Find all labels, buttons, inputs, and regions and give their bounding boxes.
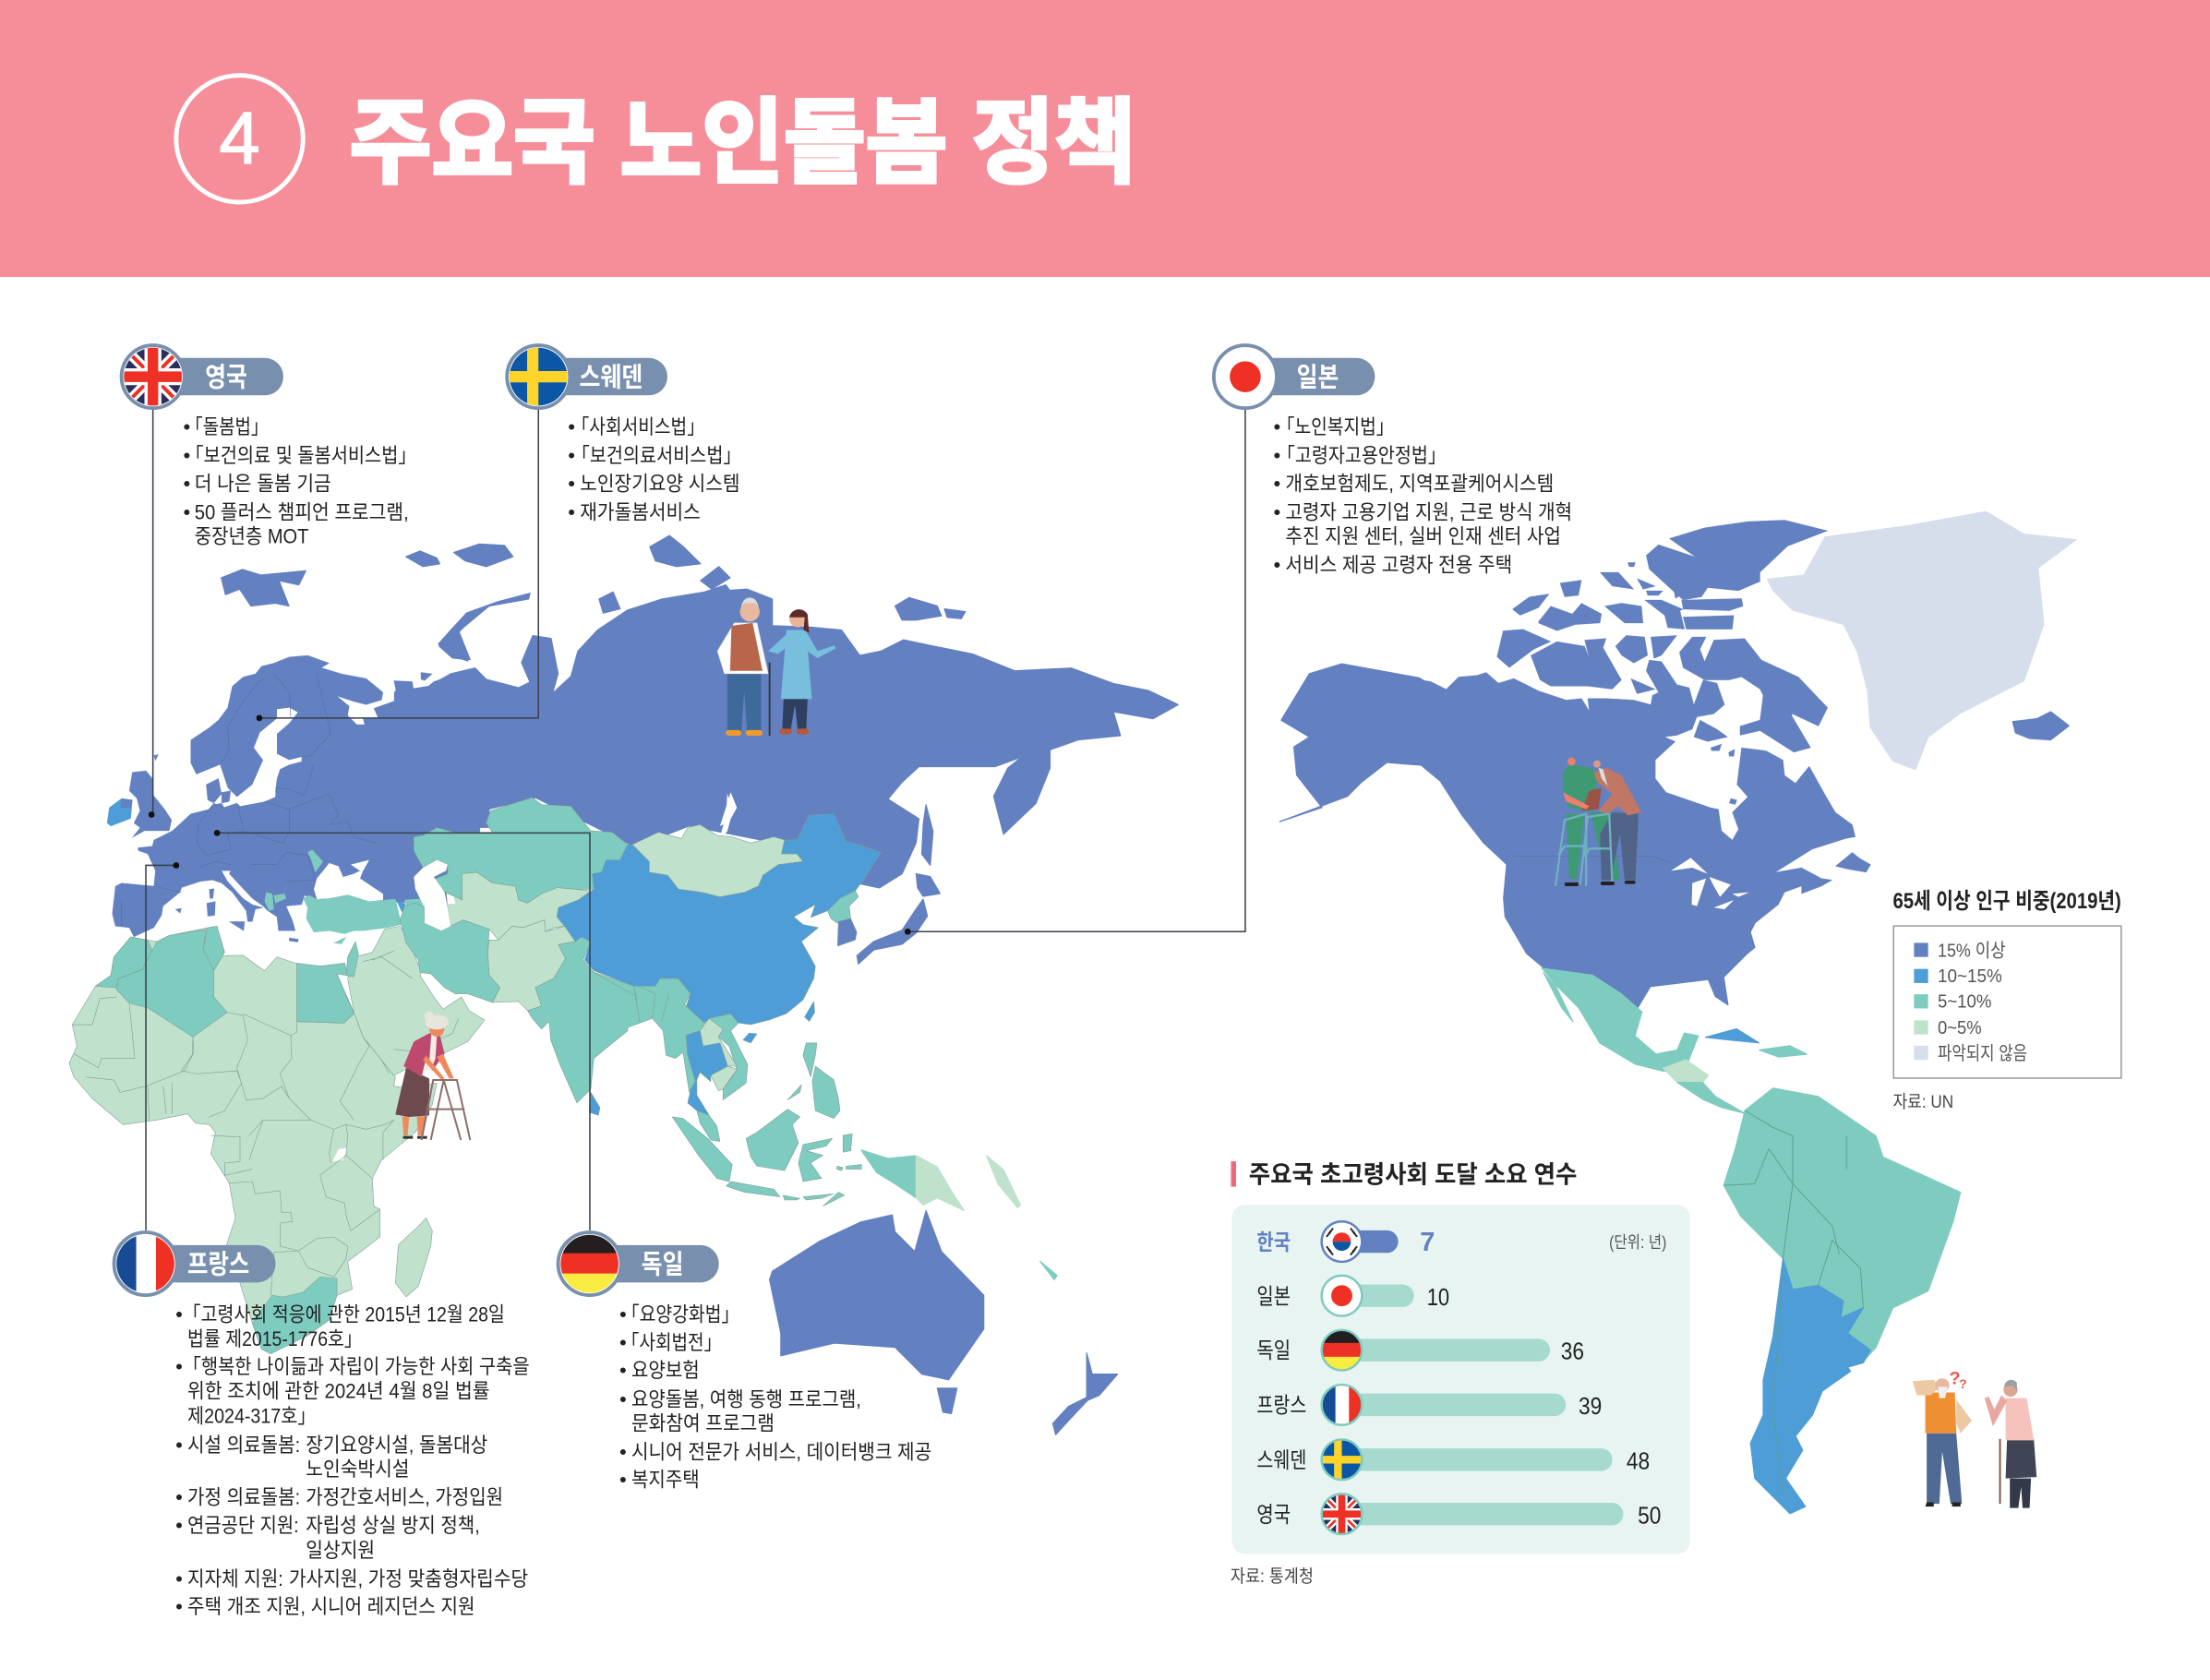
legend: 5~10%	[1938, 991, 1991, 1013]
map: Mediterranean islands	[175, 889, 298, 942]
figure: two seniors talking: ?	[1959, 1377, 1967, 1391]
map: Central and East Asia	[400, 792, 881, 1206]
map: Canada and USA	[1422, 520, 1871, 978]
text block: 프랑스 policies: •	[175, 1514, 183, 1537]
row: 영국 50: 50	[1638, 1503, 1661, 1529]
text block: 스웨덴 policies: 노인장기요양 시스템	[580, 472, 740, 495]
text block: 스웨덴 policies: 「사회서비스법」	[571, 415, 704, 438]
leader lines to countries	[146, 409, 1245, 1230]
map: Greenland	[1768, 511, 2076, 770]
text block: 일본 policies: 추진 지원 센터, 실버 인재 센터 사업	[1285, 525, 1561, 548]
text block: 독일 policies: •	[619, 1387, 627, 1410]
world map	[69, 511, 2076, 1514]
text block: 프랑스 policies: 「고령사회 적응에 관한 2015년 12월 28일	[183, 1303, 505, 1326]
section number badge: 4	[219, 97, 260, 179]
row: 일본 10	[1256, 1276, 1449, 1316]
source: UN: 자료: UN	[1892, 1092, 1953, 1112]
row: 프랑스 39: 프랑스	[1256, 1393, 1306, 1418]
text block: 독일 policies: •	[619, 1303, 627, 1326]
text block: 프랑스 policies: 법률 제2015-1776호」	[187, 1327, 362, 1350]
text block: 스웨덴 policies	[568, 415, 741, 523]
text block: 프랑스 policies: 장기요양시설, 돌봄대상	[306, 1434, 487, 1457]
text block: 프랑스 policies: 가정간호서비스, 가정입원	[306, 1486, 503, 1509]
row: 스웨덴 48: 48	[1627, 1448, 1650, 1474]
text block: 프랑스 policies: 노인숙박시설	[306, 1458, 410, 1481]
row: 프랑스 39	[1256, 1385, 1602, 1425]
row: 영국 50	[1256, 1494, 1661, 1534]
text block: 일본 policies: •	[1273, 472, 1280, 495]
unit note: (단위: 년)	[1609, 1232, 1666, 1252]
text block: 독일 policies	[619, 1303, 931, 1492]
text block: 독일 policies: 시니어 전문가 서비스, 데이터뱅크 제공	[631, 1441, 931, 1464]
section number badge	[176, 76, 303, 202]
legend: 0~5%	[1938, 1017, 1982, 1038]
map: Mexico and Central America	[1542, 968, 1807, 1113]
row: 한국 7	[1256, 1221, 1435, 1262]
map: New Guinea and Pacific	[861, 1150, 1057, 1279]
text block: 영국 policies: 더 나은 돌봄 기금	[195, 472, 331, 495]
row: 일본 10: 10	[1427, 1285, 1449, 1311]
badge: 영국	[122, 345, 283, 408]
text block: 프랑스 policies: 연금공단 지원:	[187, 1514, 299, 1537]
map: South America	[1724, 1088, 1961, 1514]
text block: 독일 policies: 문화참여 프로그램	[631, 1411, 775, 1434]
text block: 프랑스 policies: •	[175, 1567, 183, 1590]
map: Tasmania	[937, 1388, 957, 1413]
text block: 영국 policies: 중장년층 MOT	[195, 524, 308, 547]
badge: 독일	[559, 1232, 719, 1295]
panel: years to super-aged society	[1231, 1205, 1690, 1554]
badge: 프랑스: 프랑스	[187, 1249, 249, 1279]
text block: 일본 policies: 「노인복지법」	[1277, 415, 1394, 438]
text block: 스웨덴 policies: 「보건의료서비스법」	[571, 444, 741, 467]
text block: 프랑스 policies: 제2024-317호」	[187, 1405, 316, 1428]
badge: 스웨덴	[507, 345, 667, 408]
text block: 프랑스 policies: 일상지원	[306, 1539, 375, 1562]
text block: 독일 policies: 요양돌봄, 여행 동행 프로그램,	[631, 1387, 861, 1410]
legend: 10~15%	[1938, 966, 2002, 987]
map: Turkey and Caucasus	[303, 894, 402, 934]
legend	[1893, 926, 2121, 1078]
map: Australia	[770, 1211, 984, 1380]
text block: 영국 policies: •	[183, 444, 190, 467]
figure: old man and nurse	[717, 597, 835, 736]
text block: 프랑스 policies: 시설 의료돌봄:	[187, 1434, 300, 1457]
map: Japan	[857, 874, 940, 964]
text block: 프랑스 policies: 위한 조치에 관한 2024년 4월 8일 법률	[187, 1379, 490, 1402]
row: 영국 50: 영국	[1256, 1503, 1291, 1528]
map: Newfoundland	[1835, 852, 1871, 872]
text block: 일본 policies: 고령자 고용기업 지원, 근로 방식 개혁	[1285, 500, 1572, 523]
header band	[0, 0, 2210, 277]
text block: 프랑스 policies: 주택 개조 지원, 시니어 레지던스 지원	[187, 1595, 475, 1618]
text block: 일본 policies: 서비스 제공 고령자 전용 주택	[1285, 553, 1512, 576]
map: Caspian and Aral	[414, 860, 450, 930]
text block: 프랑스 policies: 자립성 상실 방지 정책,	[306, 1514, 480, 1537]
map: southern USA	[1542, 958, 1734, 1008]
text block: 스웨덴 policies: •	[568, 444, 575, 467]
text block: 독일 policies: •	[619, 1469, 627, 1492]
text block: 스웨덴 policies: •	[568, 472, 575, 495]
map: Russia	[222, 535, 1178, 888]
badge: 일본: 일본	[1297, 362, 1339, 392]
map: Asian borders	[594, 972, 669, 1022]
map: Baffin	[1679, 637, 1828, 726]
text block: 일본 policies: •	[1273, 444, 1280, 467]
text block: 프랑스 policies: 가정 의료돌봄:	[187, 1486, 300, 1509]
text block: 일본 policies: 개호보험제도, 지역포괄케어시스템	[1285, 472, 1554, 495]
row: 일본 10: 일본	[1256, 1285, 1291, 1309]
text block: 독일 policies: •	[619, 1441, 627, 1464]
legend: 파악되지 않음	[1938, 1043, 2027, 1064]
source: 통계청: 자료: 통계청	[1231, 1566, 1314, 1587]
row: 독일 36	[1256, 1330, 1584, 1371]
text block: 스웨덴 policies: •	[568, 415, 575, 438]
text block: 프랑스 policies	[175, 1303, 530, 1618]
map: Africa and Arabia	[69, 926, 485, 1354]
text block: 영국 policies: 「돌봄법」	[186, 415, 269, 438]
text block: 프랑스 policies: 지자체 지원:	[187, 1567, 283, 1590]
badge: 독일: 독일	[642, 1249, 683, 1279]
text block: 일본 policies: •	[1273, 500, 1280, 523]
text block: 독일 policies: 「사회법전」	[621, 1331, 722, 1354]
map: Baltic sea	[194, 708, 302, 810]
badge: 프랑스	[114, 1232, 275, 1295]
text block: 영국 policies: •	[183, 500, 190, 523]
map: Europe	[107, 630, 480, 944]
badge: 일본	[1214, 345, 1375, 408]
row: 스웨덴 48	[1256, 1439, 1650, 1480]
text block: 독일 policies: 복지주택	[631, 1469, 700, 1492]
text block: 독일 policies: 「요양강화법」	[621, 1303, 739, 1326]
text block: 프랑스 policies: 가사지원, 가정 맞춤형자립수당	[289, 1567, 528, 1590]
row: 한국 7: 한국	[1256, 1230, 1291, 1255]
map: Great Lakes	[1671, 858, 1749, 909]
text block: 영국 policies: •	[183, 415, 190, 438]
badge: 스웨덴: 스웨덴	[580, 362, 643, 392]
row: 스웨덴 48: 스웨덴	[1256, 1448, 1306, 1473]
text block: 스웨덴 policies: •	[568, 500, 575, 523]
figure: couple with walker	[1555, 758, 1641, 886]
map: Iceland	[2012, 712, 2069, 740]
map: Ireland	[107, 798, 132, 826]
text block: 영국 policies: 50 플러스 챔피언 프로그램,	[195, 500, 409, 523]
text block: 독일 policies: •	[619, 1359, 627, 1382]
row: 독일 36: 36	[1561, 1339, 1584, 1365]
text block: 프랑스 policies: •	[175, 1434, 183, 1457]
map: Alaska	[1279, 664, 1426, 822]
chart heading: 주요국 초고령사회 도달 소요 연수	[1249, 1161, 1577, 1189]
text block: 독일 policies: 요양보험	[631, 1359, 700, 1382]
row: 한국 7: 7	[1420, 1228, 1435, 1257]
map: Black Sea	[314, 860, 383, 902]
figure: two seniors talking	[1913, 1368, 2036, 1508]
row: 독일 36: 독일	[1256, 1339, 1291, 1363]
row: 프랑스 39: 39	[1579, 1394, 1602, 1420]
text block: 프랑스 policies: •	[175, 1355, 183, 1378]
text block: 일본 policies: •	[1273, 415, 1280, 438]
text block: 프랑스 policies: •	[175, 1303, 183, 1326]
text block: 일본 policies	[1273, 415, 1572, 576]
text block: 프랑스 policies: •	[175, 1595, 183, 1618]
text block: 프랑스 policies: 「행복한 나이듦과 자립이 가능한 사회 구축을	[183, 1355, 530, 1378]
text block: 영국 policies	[183, 415, 416, 547]
map: Arabia	[348, 926, 485, 1075]
figure: woman with walker	[395, 1012, 470, 1140]
map: New Zealand	[1053, 1353, 1118, 1434]
text block: 스웨덴 policies: 재가돌봄서비스	[580, 500, 701, 523]
legend title: 65세 이상 인구 비중(2019년)	[1892, 889, 2121, 914]
title: 주요국 노인돌봄 정책	[350, 91, 1136, 195]
text block: 독일 policies: •	[619, 1331, 627, 1354]
map: UK	[129, 771, 172, 837]
map: Arctic archipelago	[1497, 630, 1551, 667]
map: European borders	[122, 674, 377, 926]
legend: 15% 이상	[1938, 941, 2006, 962]
text block: 영국 policies: •	[183, 472, 190, 495]
badge: 영국: 영국	[205, 362, 247, 392]
figure: two seniors talking: ?	[1950, 1368, 1961, 1388]
chart heading accent	[1231, 1161, 1236, 1187]
text block: 프랑스 policies: •	[175, 1486, 183, 1509]
text block: 영국 policies: 「보건의료 및 돌봄서비스법」	[186, 444, 416, 467]
text block: 일본 policies: 「고령자고용안정법」	[1277, 444, 1446, 467]
text block: 일본 policies: •	[1273, 553, 1280, 576]
map: African borders	[72, 951, 459, 1295]
